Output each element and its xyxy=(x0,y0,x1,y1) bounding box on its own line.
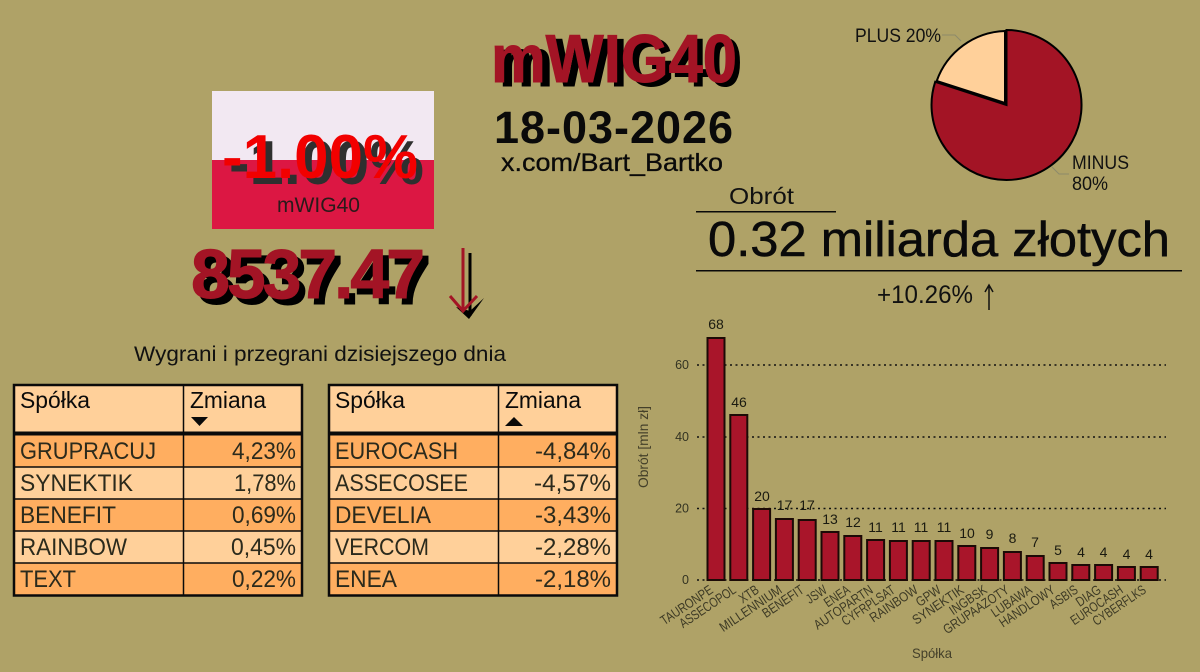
label: minus: MINUS xyxy=(1072,153,1129,174)
bar chart: turnover by company xyxy=(635,316,1166,661)
bar value labels: 4 xyxy=(1145,546,1153,562)
bar value labels: 8 xyxy=(1009,530,1017,546)
table: losers: -2,18% xyxy=(535,566,611,593)
table: winners: BENEFIT xyxy=(20,502,116,529)
turnover value: 0.32 miliarda złotych xyxy=(708,213,1170,267)
x axis category labels: TAURONPE xyxy=(658,582,716,628)
table: winners: GRUPRACUJ xyxy=(20,438,156,465)
x axis title: Spółka xyxy=(912,645,952,661)
index value: 8537.47 xyxy=(197,241,431,319)
x axis category labels: XTB xyxy=(736,582,762,606)
y axis title: Obrót [mln zł] xyxy=(635,406,651,488)
table: losers: Spółka xyxy=(335,387,405,413)
y axis ticks: 60 xyxy=(675,358,689,372)
bar value labels: 4 xyxy=(1123,546,1131,562)
table: losers xyxy=(329,385,617,596)
x axis category labels: EUROCASH xyxy=(1068,582,1126,628)
x axis category labels: INGBSK xyxy=(946,582,990,618)
slice: plus 20% xyxy=(937,31,1005,103)
x axis category labels: LUBAWA xyxy=(988,582,1035,620)
heading: winners and losers: Wygrani i przegrani dzisiejszego dnia xyxy=(134,343,506,366)
bars xyxy=(708,338,1158,580)
date: 18-03-2026 xyxy=(494,102,733,153)
arrow: up xyxy=(985,285,993,310)
x axis category labels: AUTOPARTN xyxy=(811,582,876,633)
x axis category labels xyxy=(658,582,1149,637)
x axis category labels: GPW xyxy=(913,582,944,610)
table: losers: ASSECOSEE xyxy=(335,470,468,497)
source handle: x.com/Bart_Bartko xyxy=(501,149,723,177)
pie chart: share of gainers and losers xyxy=(855,26,1129,195)
y axis ticks: 20 xyxy=(675,502,689,516)
table: losers: -3,43% xyxy=(535,502,611,529)
bar value labels: 12 xyxy=(845,514,861,530)
bar value labels: 11 xyxy=(868,519,883,535)
bar value labels: 5 xyxy=(1054,542,1062,558)
x axis category labels: GRUPAAZOTY xyxy=(940,582,1012,637)
x axis category labels: DIAG xyxy=(1073,582,1104,610)
x axis category labels: JSW xyxy=(803,582,830,607)
x axis category labels: HANDLOWY xyxy=(996,582,1058,630)
bar value labels: 11 xyxy=(937,519,951,535)
label: minus: 80% xyxy=(1072,174,1108,195)
turnover label xyxy=(696,183,836,212)
table: losers: VERCOM xyxy=(335,534,429,561)
flag panel with index change xyxy=(212,91,434,229)
x axis category labels: CYBERFLKS xyxy=(1090,582,1149,629)
table: winners: Spółka xyxy=(20,387,90,413)
title: mWIG40: mWIG40 xyxy=(491,21,737,97)
x axis category labels: SYNEKTIK xyxy=(909,582,967,627)
index value: 8537.47 xyxy=(191,235,425,313)
label: plus: PLUS 20% xyxy=(855,26,941,47)
arrow: down xyxy=(450,248,484,319)
bar value labels: 20 xyxy=(754,488,770,504)
bar value labels: 4 xyxy=(1077,544,1085,560)
slice: minus 80% xyxy=(932,30,1082,180)
y axis ticks xyxy=(675,358,689,587)
table: winners: 1,78% xyxy=(234,470,296,497)
icon: sort descending xyxy=(191,417,208,426)
table: losers: Zmiana xyxy=(505,387,581,413)
label: minus xyxy=(1072,153,1129,195)
bar value labels: 10 xyxy=(959,525,975,541)
turnover change: +10.26% xyxy=(877,281,973,309)
table: losers: EUROCASH xyxy=(335,438,458,465)
percent change: -1.00% xyxy=(222,123,418,192)
grid lines xyxy=(697,365,1166,580)
bar value labels xyxy=(708,316,1153,562)
y axis ticks: 40 xyxy=(675,430,689,444)
table: winners: 0,45% xyxy=(231,534,296,561)
bar value labels: 13 xyxy=(822,511,838,527)
x axis category labels: ASBIS xyxy=(1047,582,1081,612)
table: winners: TEXT xyxy=(20,566,76,593)
bar value labels: 11 xyxy=(891,519,906,535)
flag caption: mWIG40 xyxy=(277,194,360,217)
bar value labels: 46 xyxy=(731,394,747,410)
bar value labels: 7 xyxy=(1031,534,1039,550)
table: winners: 0,69% xyxy=(232,502,296,529)
bar value labels: 11 xyxy=(914,519,928,535)
table: losers: DEVELIA xyxy=(335,502,431,529)
table: winners: SYNEKTIK xyxy=(20,470,133,497)
x axis category labels: BENEFIT xyxy=(759,582,807,621)
table: winners: 4,23% xyxy=(232,438,296,465)
percent change: -1.00% xyxy=(229,129,424,198)
table: winners: 0,22% xyxy=(232,566,296,593)
table: winners: Zmiana xyxy=(190,387,266,413)
turnover label: Obrót xyxy=(729,183,795,209)
y axis ticks: 0 xyxy=(682,573,689,587)
bar value labels: 9 xyxy=(986,526,994,542)
x axis category labels: RAINBOW xyxy=(867,582,921,625)
icon: sort ascending xyxy=(505,417,523,426)
table: losers: ENEA xyxy=(335,566,397,593)
table: losers: -2,28% xyxy=(535,534,611,561)
bar value labels: 4 xyxy=(1100,544,1108,560)
title: mWIG40: mWIG40 xyxy=(499,25,742,101)
x axis category labels: ASSECOPOL xyxy=(676,582,739,631)
bar value labels: 68 xyxy=(708,316,724,332)
x axis category labels: ENEA xyxy=(821,582,853,610)
bar value labels: 17 xyxy=(777,497,792,513)
x axis category labels: MILLENNIUM xyxy=(717,582,785,635)
bar value labels: 17 xyxy=(799,497,815,513)
x axis category labels: CYFRPLSAT xyxy=(839,582,898,629)
table: winners xyxy=(14,385,302,596)
table: winners: RAINBOW xyxy=(20,534,127,561)
table: losers: -4,57% xyxy=(534,470,611,497)
table: losers: -4,84% xyxy=(535,438,611,465)
